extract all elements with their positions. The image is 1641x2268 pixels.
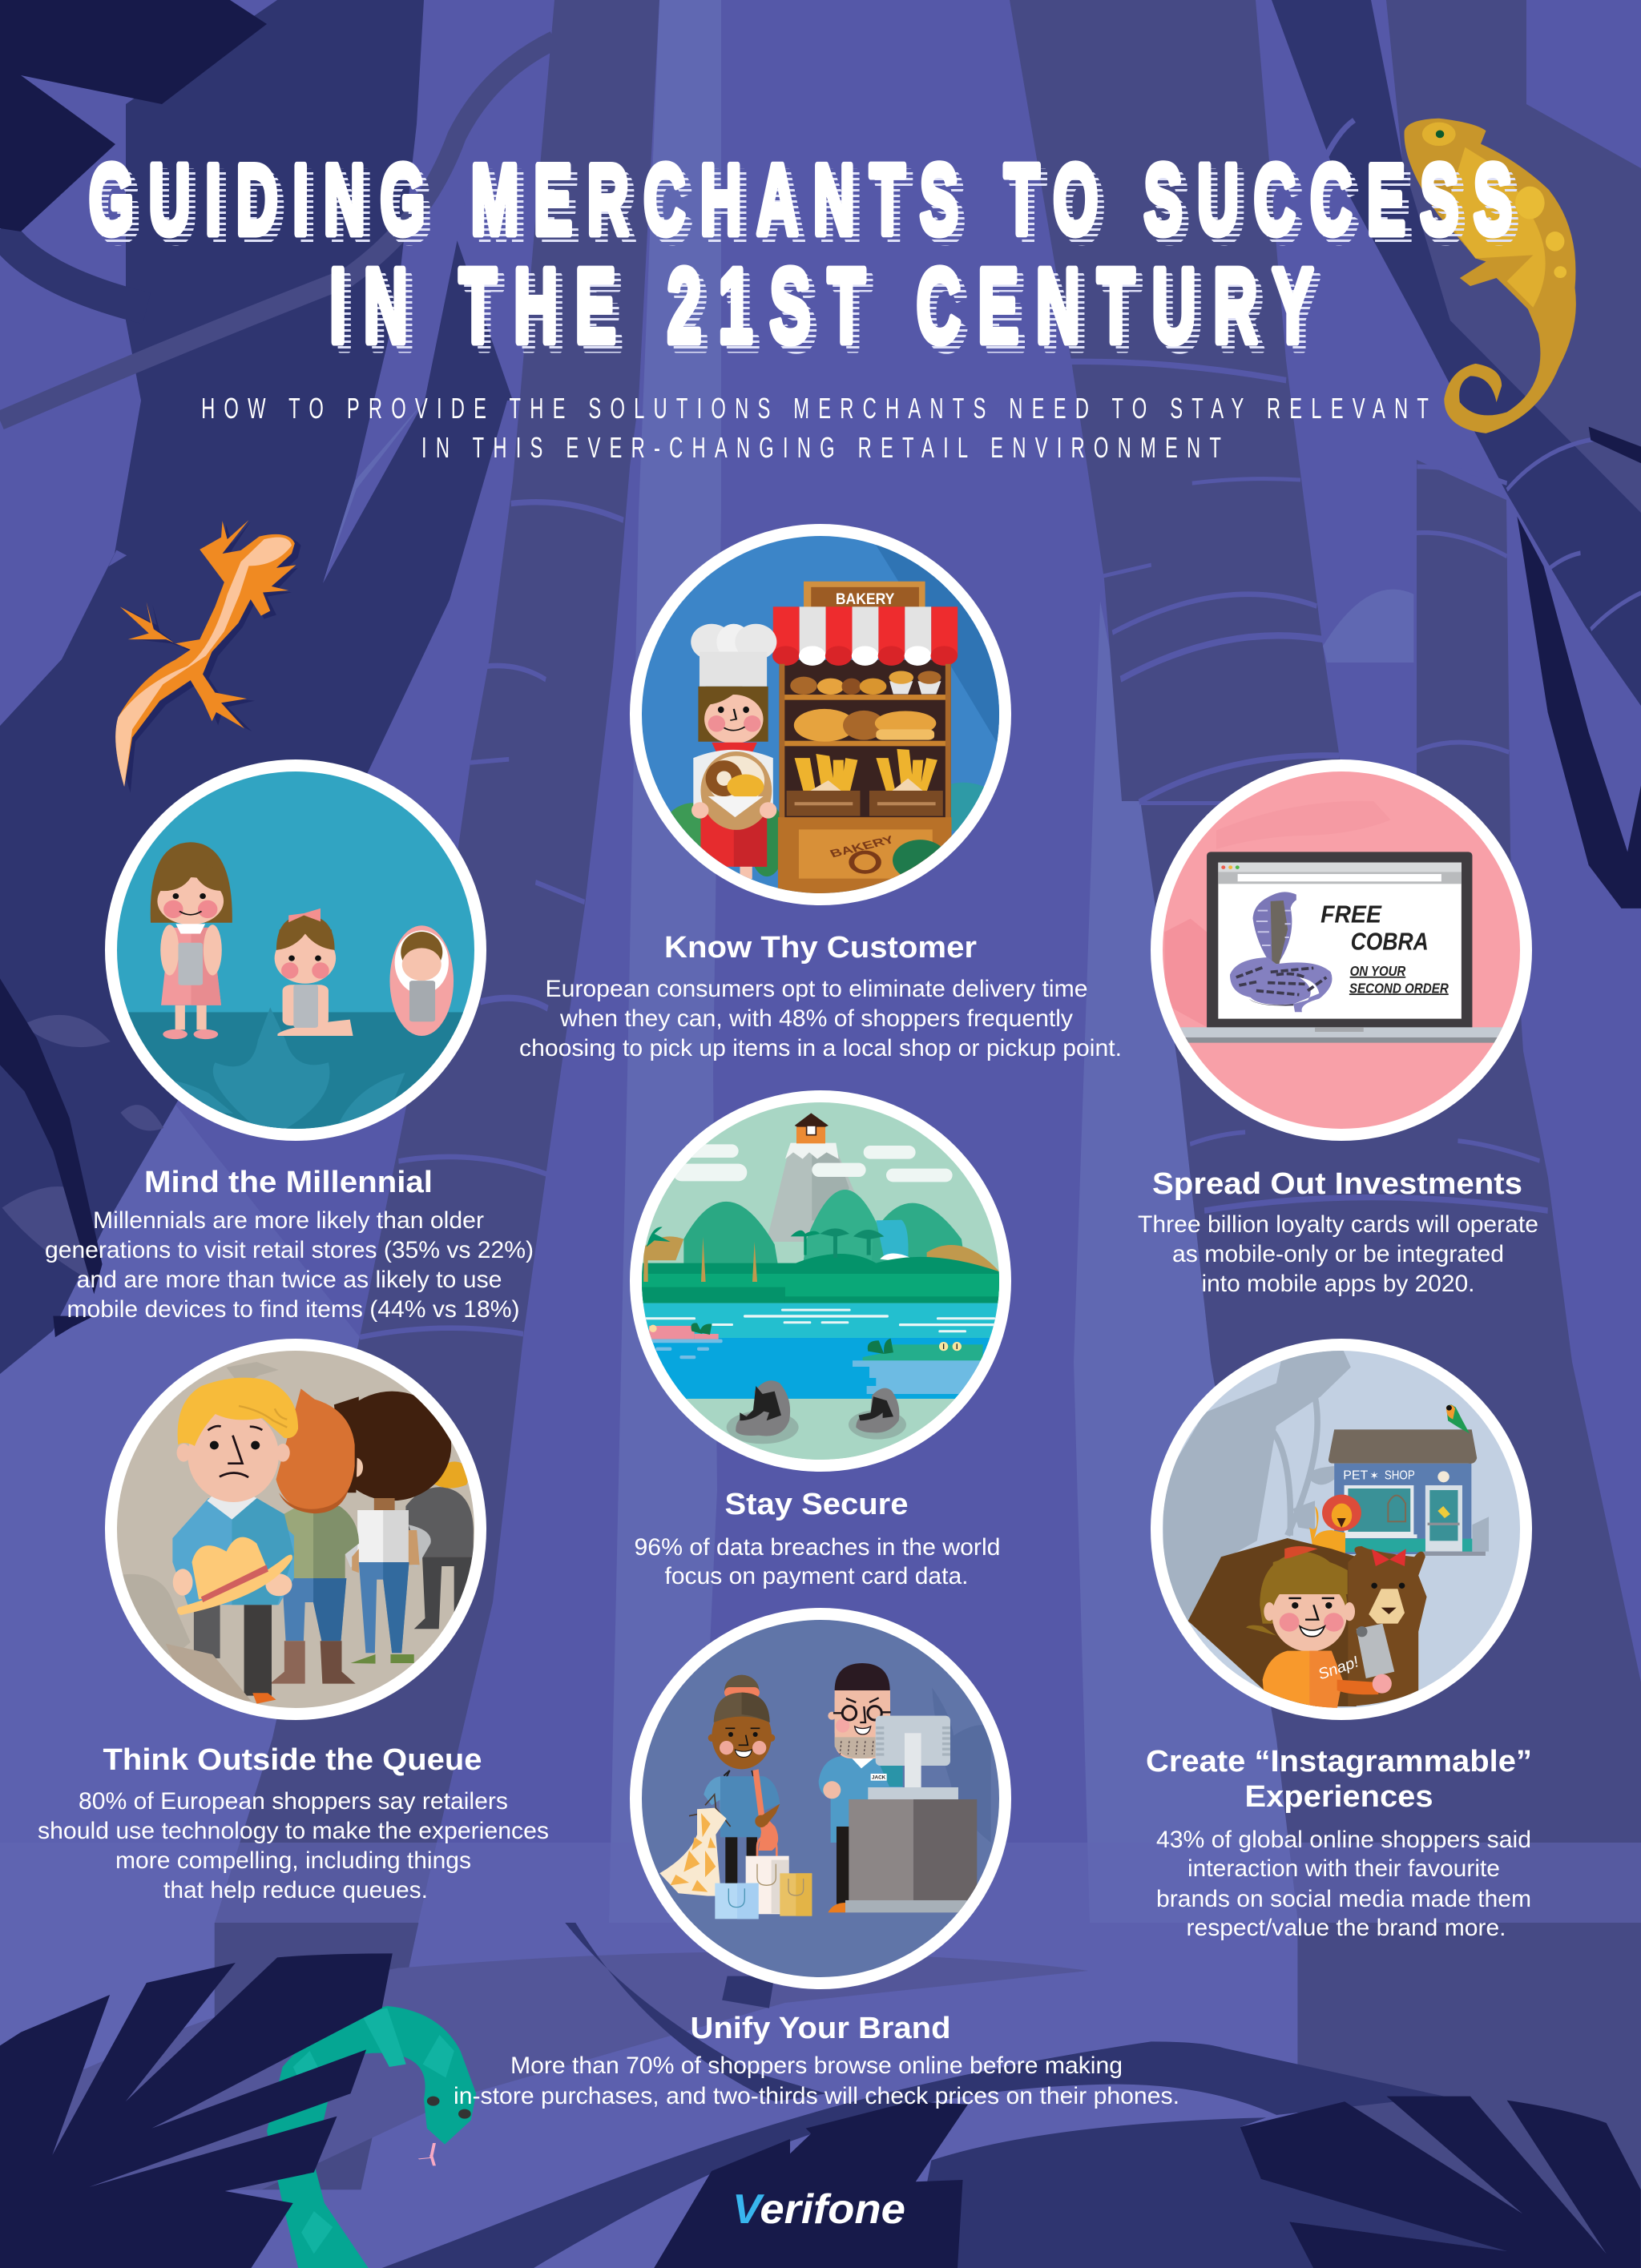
caption: think outside the queue: 80% of European shoppers say retailers <box>79 1788 508 1815</box>
caption: unify your brand: More than 70% of shoppers browse online before making <box>510 2052 1123 2079</box>
caption: mind the millennial <box>45 1166 534 1323</box>
subtitle <box>201 393 1429 464</box>
circle: free cobra laptop: FREE <box>1320 900 1382 928</box>
circle: pet shop selfie: Snap! <box>1316 1653 1361 1683</box>
snake <box>267 2006 476 2268</box>
caption: unify your brand: in-store purchases, and two-thirds will check prices on their phones. <box>454 2083 1179 2109</box>
caption: know thy customer <box>519 931 1122 1061</box>
caption: stay secure: Stay Secure <box>724 1488 909 1521</box>
caption: think outside the queue: Think Outside the Queue <box>103 1743 482 1777</box>
caption: spread out investments: Spread Out Investments <box>1152 1167 1522 1201</box>
caption: mind the millennial: Mind the Millennial <box>144 1166 433 1199</box>
caption: instagrammable experiences: Experiences <box>1245 1780 1433 1814</box>
caption: spread out investments <box>1138 1167 1538 1297</box>
subtitle: IN THIS EVER-CHANGING RETAIL ENVIRONMENT <box>421 432 1221 464</box>
caption: mind the millennial: and are more than twice as likely to use <box>77 1267 502 1293</box>
bottom foliage <box>0 1923 1641 2268</box>
circle: bakery: BAKERY <box>836 590 895 607</box>
caption: think outside the queue: should use technology to make the experiences <box>38 1818 549 1844</box>
subtitle: HOW TO PROVIDE THE SOLUTIONS MERCHANTS NEED TO STAY RELEVANT <box>201 393 1429 425</box>
caption: instagrammable experiences: Create “Instagrammable” <box>1146 1745 1532 1779</box>
caption: know thy customer: Know Thy Customer <box>664 931 977 965</box>
title <box>89 145 1512 365</box>
caption: mind the millennial: Millennials are more likely than older <box>93 1207 484 1234</box>
caption: stay secure <box>635 1488 1000 1589</box>
circle: bakery <box>619 524 1025 905</box>
circle: pet shop selfie: PET <box>1343 1468 1368 1483</box>
caption: stay secure: focus on payment card data. <box>665 1563 968 1589</box>
circle: millennials <box>99 758 491 1147</box>
circle: queue <box>103 1338 489 1722</box>
caption: spread out investments: as mobile-only or be integrated <box>1172 1241 1504 1267</box>
caption: know thy customer: choosing to pick up items in a local shop or pickup point. <box>519 1035 1122 1061</box>
circle: pet shop selfie: ✶ <box>1369 1470 1379 1482</box>
title: IN THE 21ST CENTURY <box>329 246 1313 365</box>
chameleon <box>1405 119 1576 433</box>
caption: know thy customer: when they can, with 48% of shoppers frequently <box>559 1005 1073 1032</box>
caption: instagrammable experiences <box>1146 1745 1532 1941</box>
caption: mind the millennial: generations to visit retail stores (35% vs 22%) <box>45 1237 534 1263</box>
circle: free cobra laptop <box>1151 759 1534 1141</box>
circle: free cobra laptop: SECOND ORDER <box>1349 981 1449 996</box>
caption: unify your brand: Unify Your Brand <box>691 2012 950 2045</box>
circle: free cobra laptop: ON YOUR <box>1350 964 1405 979</box>
circle: island with traps <box>630 1090 1012 1473</box>
caption: unify your brand <box>454 2012 1179 2109</box>
circle: free cobra laptop: COBRA <box>1351 927 1429 955</box>
caption: know thy customer: European consumers opt to eliminate delivery time <box>545 976 1088 1002</box>
caption: instagrammable experiences: 43% of global online shoppers said <box>1156 1827 1531 1853</box>
caption: instagrammable experiences: brands on social media made them <box>1156 1886 1531 1912</box>
caption: think outside the queue: that help reduce queues. <box>163 1877 428 1903</box>
caption: think outside the queue: more compelling, including things <box>115 1847 471 1874</box>
caption: stay secure: 96% of data breaches in the world <box>635 1534 1000 1561</box>
caption: spread out investments: into mobile apps by 2020. <box>1202 1271 1474 1297</box>
circle: store checkout <box>630 1608 1012 1989</box>
circle: store checkout: JACK <box>872 1775 886 1781</box>
caption: spread out investments: Three billion loyalty cards will operate <box>1138 1211 1538 1238</box>
caption: mind the millennial: mobile devices to find items (44% vs 18%) <box>67 1296 519 1323</box>
circle: pet shop selfie: SHOP <box>1385 1468 1415 1483</box>
caption: instagrammable experiences: respect/value the brand more. <box>1186 1915 1506 1941</box>
lizard <box>115 520 301 792</box>
caption: instagrammable experiences: interaction with their favourite <box>1187 1855 1500 1882</box>
caption: think outside the queue <box>38 1743 549 1903</box>
circle: pet shop selfie <box>1149 1338 1536 1722</box>
logo: verifone: Verifone <box>732 2186 905 2233</box>
circle: bakery: BAKERY <box>828 833 897 860</box>
title: GUIDING MERCHANTS TO SUCCESS <box>89 145 1512 256</box>
